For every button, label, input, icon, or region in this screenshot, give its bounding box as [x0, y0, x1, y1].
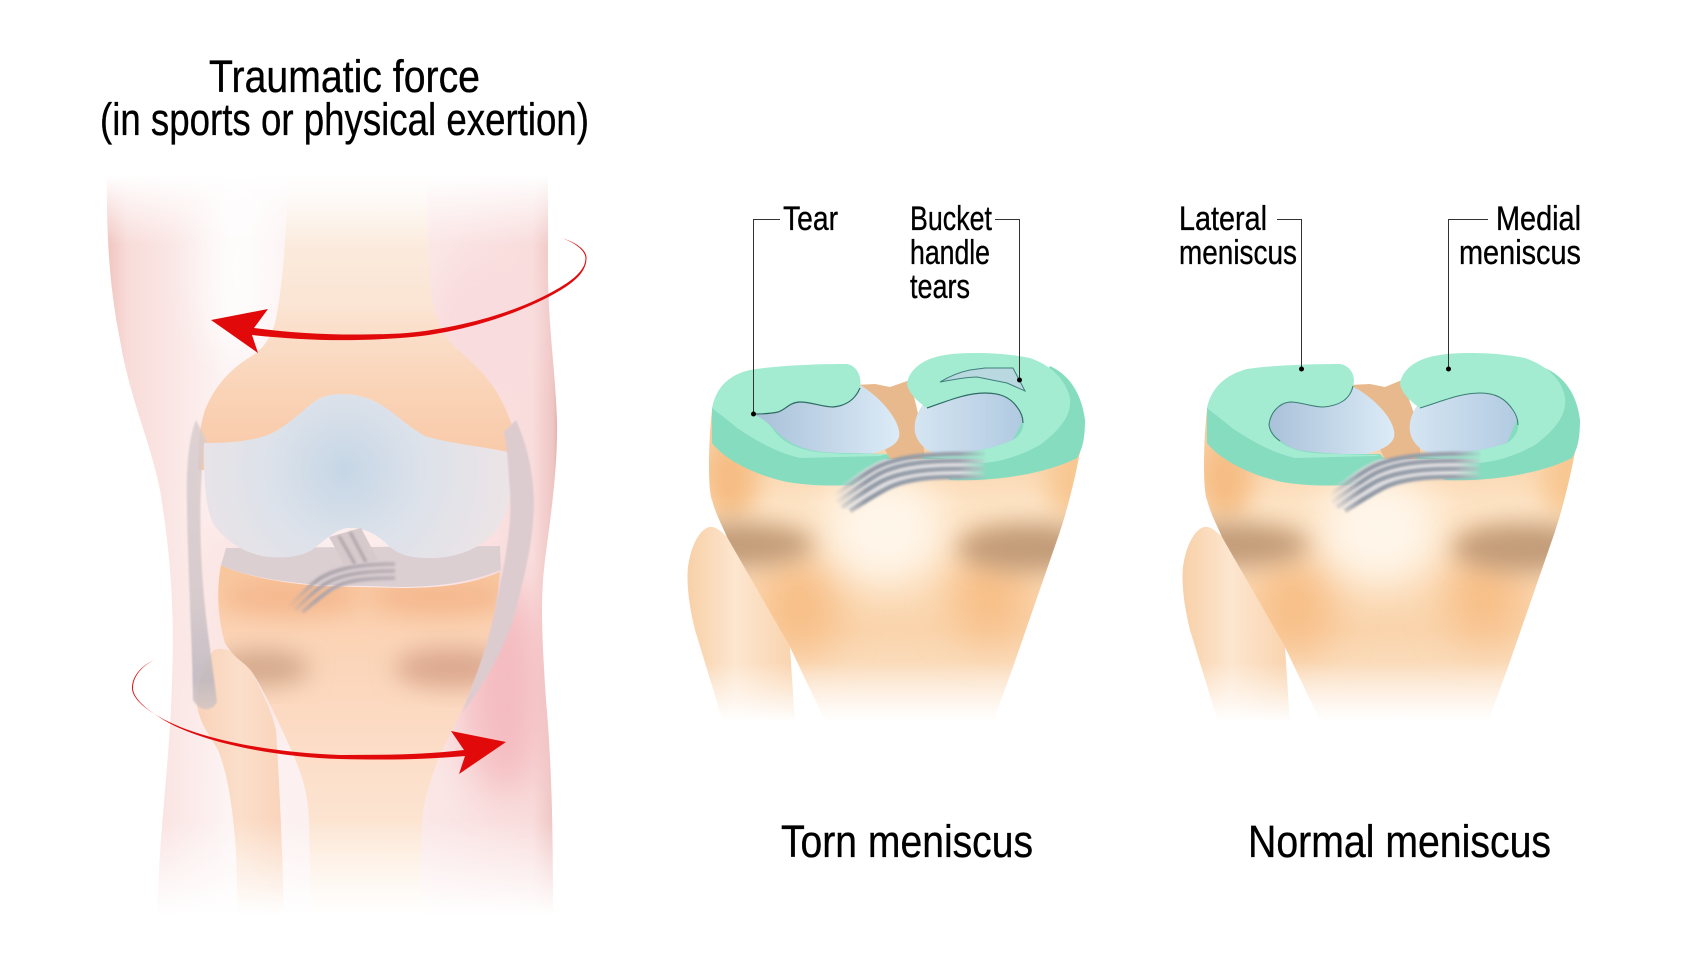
bottom fade: [95, 820, 565, 915]
panel: normal meniscus tibia: [1152, 353, 1598, 731]
bucket handle tear: [940, 368, 1025, 391]
lateral meniscus: [1207, 364, 1388, 486]
title: traumatic force: (in sports or physical exertion): [100, 94, 589, 145]
tibia bone and fibula: [1152, 410, 1598, 731]
medial meniscus: [1400, 353, 1580, 480]
label: tear: Tear: [783, 200, 838, 238]
medial meniscus: [907, 353, 1085, 480]
cruciate ligament: [329, 528, 378, 564]
label: lateral meniscus: [1179, 200, 1304, 372]
title: traumatic force: [100, 51, 589, 145]
leg soft tissue: [100, 160, 560, 920]
lateral meniscus: [712, 364, 893, 486]
caption: torn meniscus: Torn meniscus: [781, 816, 1033, 867]
medial tibial cartilage: [1410, 385, 1530, 458]
medial ligament: [462, 420, 534, 713]
label: bucket handle tears: [910, 200, 1022, 382]
transverse ligament stripes: [288, 564, 395, 612]
lateral tibial cartilage: [750, 385, 899, 458]
title: traumatic force: Traumatic force: [209, 51, 480, 102]
arrow: lower rotation: [132, 660, 506, 774]
caption: normal meniscus: Normal meniscus: [1248, 816, 1551, 867]
femoral cartilage: [204, 394, 516, 558]
label: medial meniscus: [1446, 200, 1581, 372]
label: bucket handle tears: Bucket: [910, 200, 992, 238]
label: bucket handle tears: tears: [910, 268, 970, 306]
arrow: upper rotation: [211, 238, 586, 353]
panel: knee front view: [95, 160, 565, 920]
label: lateral meniscus: meniscus: [1179, 234, 1297, 272]
label: tear: [751, 200, 838, 416]
intercondylar area: [855, 380, 925, 460]
label: medial meniscus: meniscus: [1459, 234, 1581, 272]
upper gradient fade: [95, 175, 565, 245]
fibula: [197, 649, 284, 915]
lateral tibial cartilage: [1262, 385, 1394, 458]
panel: torn meniscus tibia: [657, 353, 1103, 731]
medial tibial cartilage: [915, 385, 1030, 458]
top fade: [95, 160, 565, 176]
transverse ligament: [1327, 454, 1480, 511]
tibial meniscus band: [221, 546, 501, 587]
lateral ligament: [187, 420, 217, 709]
label: lateral meniscus: Lateral: [1179, 200, 1267, 238]
transverse ligament: [832, 454, 985, 511]
femur: [198, 165, 518, 470]
tibia: [218, 565, 500, 880]
label: medial meniscus: Medial: [1496, 200, 1581, 238]
label: bucket handle tears: handle: [910, 234, 990, 272]
intercondylar area: [1350, 380, 1420, 460]
tibia bone and fibula: [657, 410, 1103, 731]
